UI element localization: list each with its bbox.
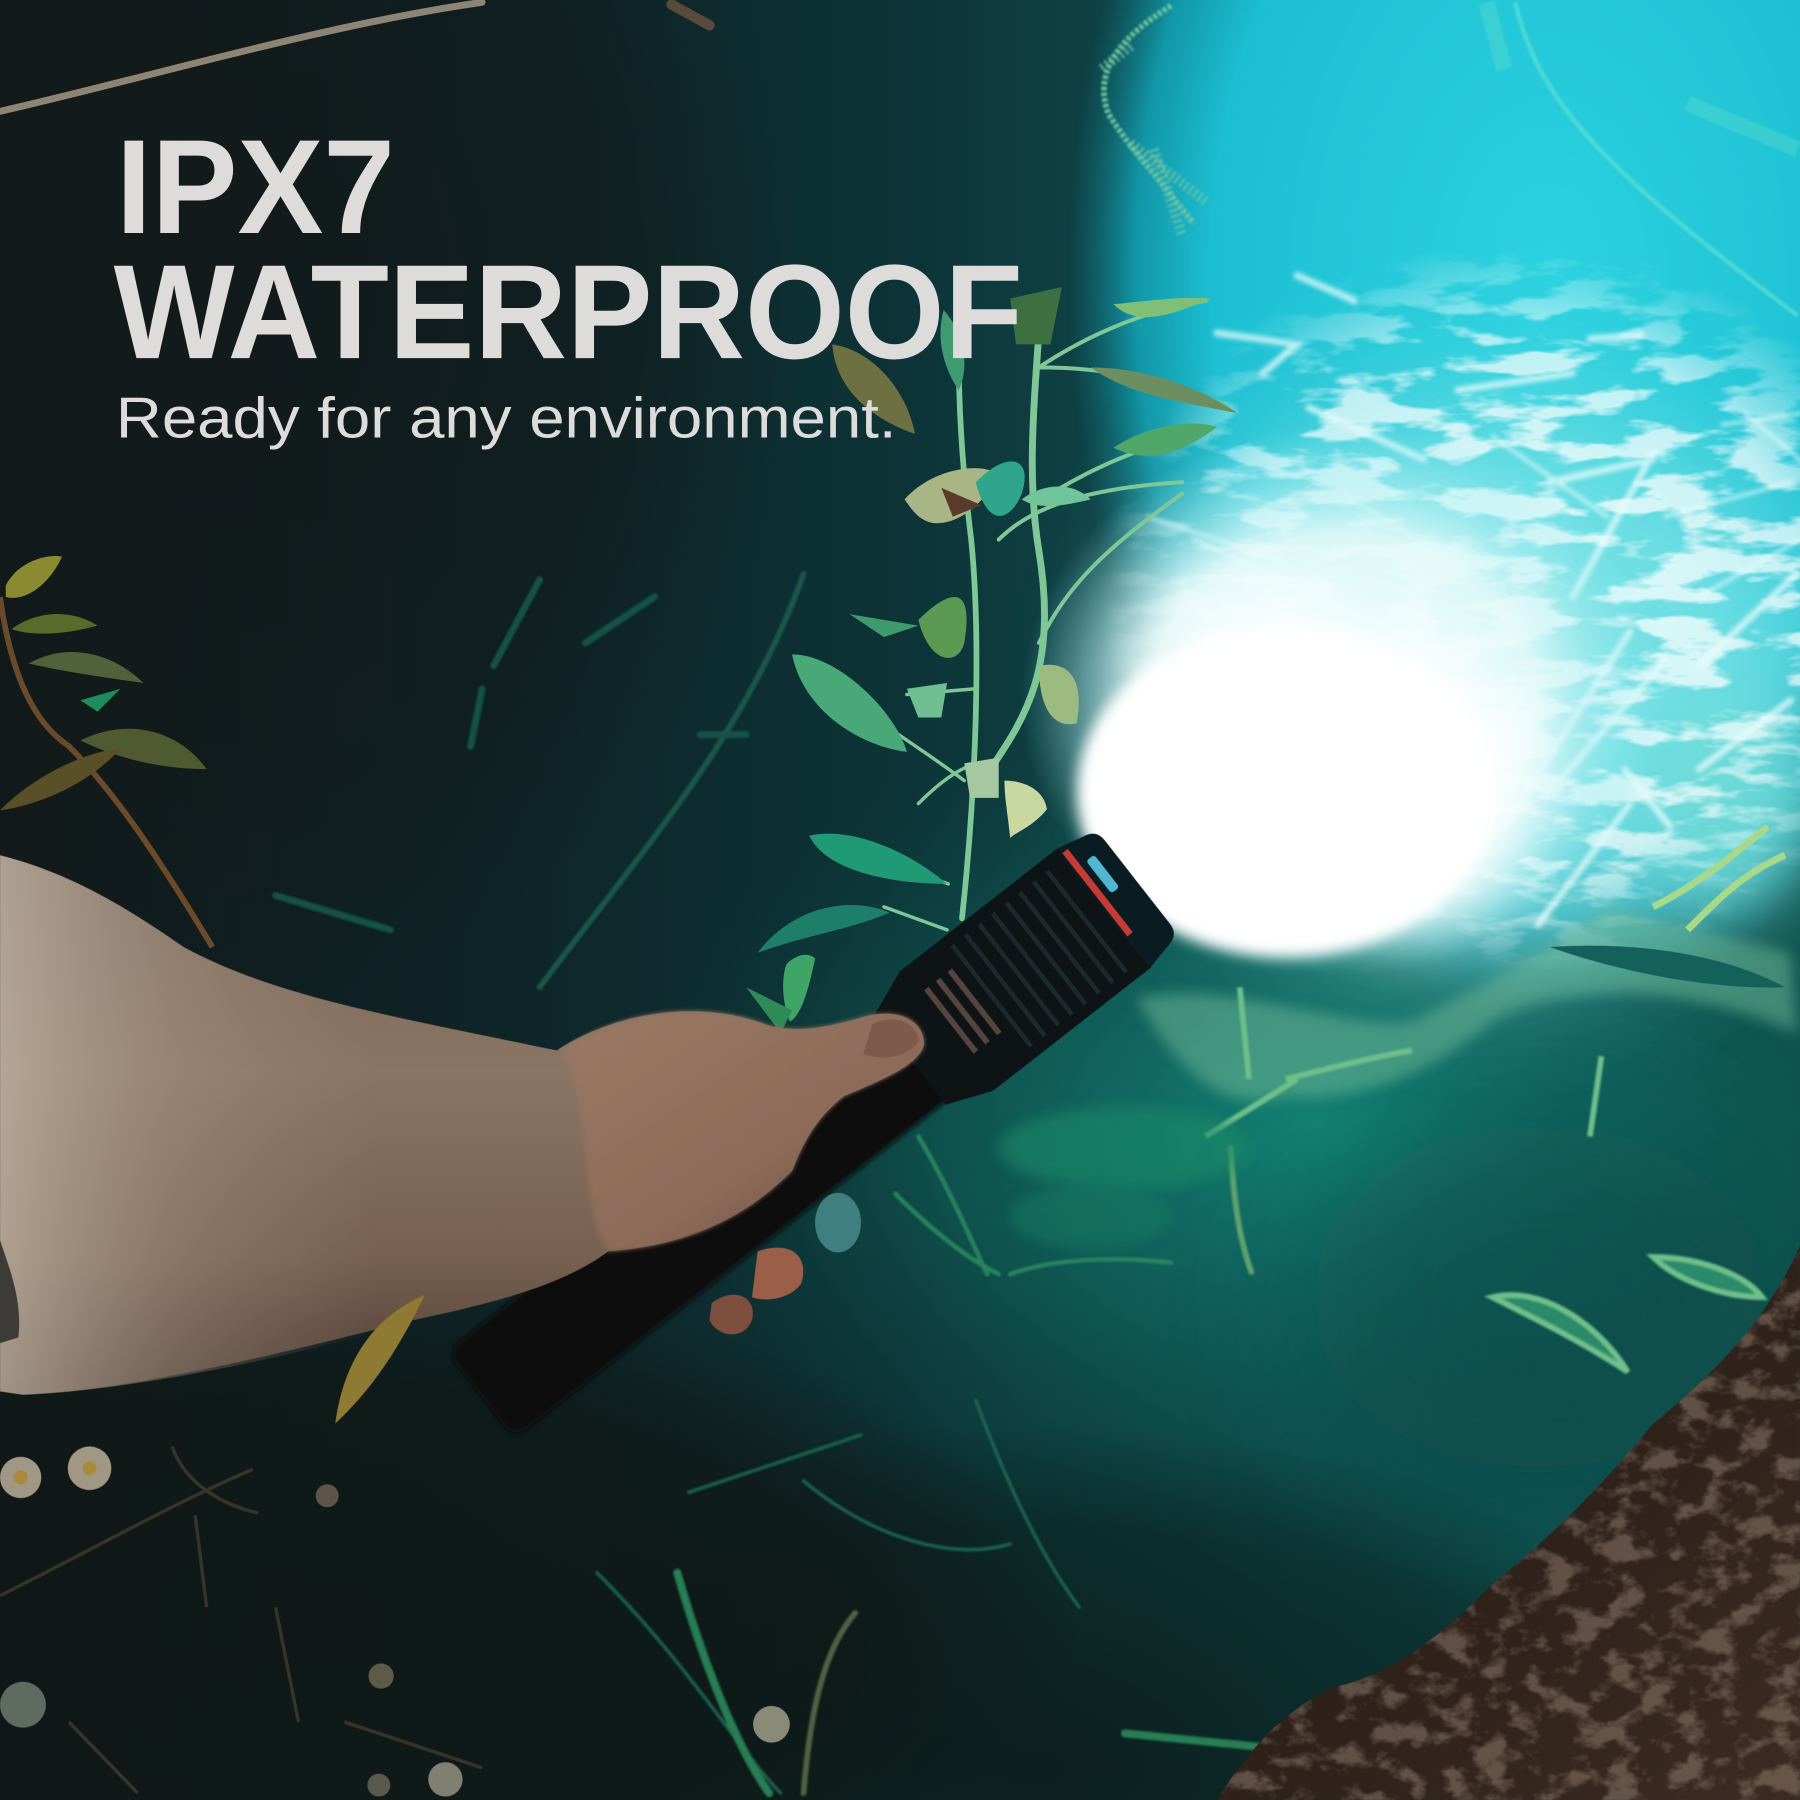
top seaweed bbox=[1102, 2, 1798, 316]
flashlight grip bbox=[864, 848, 1151, 1119]
arm and hand bbox=[0, 855, 924, 1395]
green leaves bbox=[746, 287, 1238, 1033]
flashlight head bbox=[1056, 822, 1184, 969]
foam and aquatic weeds in the beam bbox=[1102, 241, 1800, 976]
hand fingers under handle bbox=[709, 1193, 861, 1334]
background grasses bbox=[276, 574, 1263, 1793]
brown leaf bbox=[832, 344, 915, 434]
title line: WATERPROOF: WATERPROOF bbox=[114, 237, 1023, 387]
flashlight handle bbox=[447, 998, 967, 1439]
top branch bbox=[0, 2, 709, 111]
model mark bbox=[1086, 855, 1120, 894]
small daisies bbox=[0, 1446, 790, 1797]
title line: IPX7: IPX7 bbox=[116, 112, 395, 262]
left plant bbox=[0, 556, 212, 947]
red ring bbox=[1065, 851, 1130, 934]
lower-left twigs bbox=[0, 1446, 482, 1793]
lower-right weeds bbox=[999, 827, 1798, 1372]
tree trunk bbox=[1217, 1246, 1800, 1800]
grip ribs bbox=[915, 871, 1126, 1075]
yellow fallen leaf bbox=[335, 1295, 425, 1423]
spotted leaf bbox=[905, 468, 996, 523]
subtitle: Ready for any environment. bbox=[116, 386, 897, 450]
flashlight bbox=[434, 822, 1184, 1455]
central plant bbox=[746, 287, 1238, 1033]
title bbox=[114, 112, 1023, 387]
white flashlight beam bbox=[1022, 425, 1665, 976]
